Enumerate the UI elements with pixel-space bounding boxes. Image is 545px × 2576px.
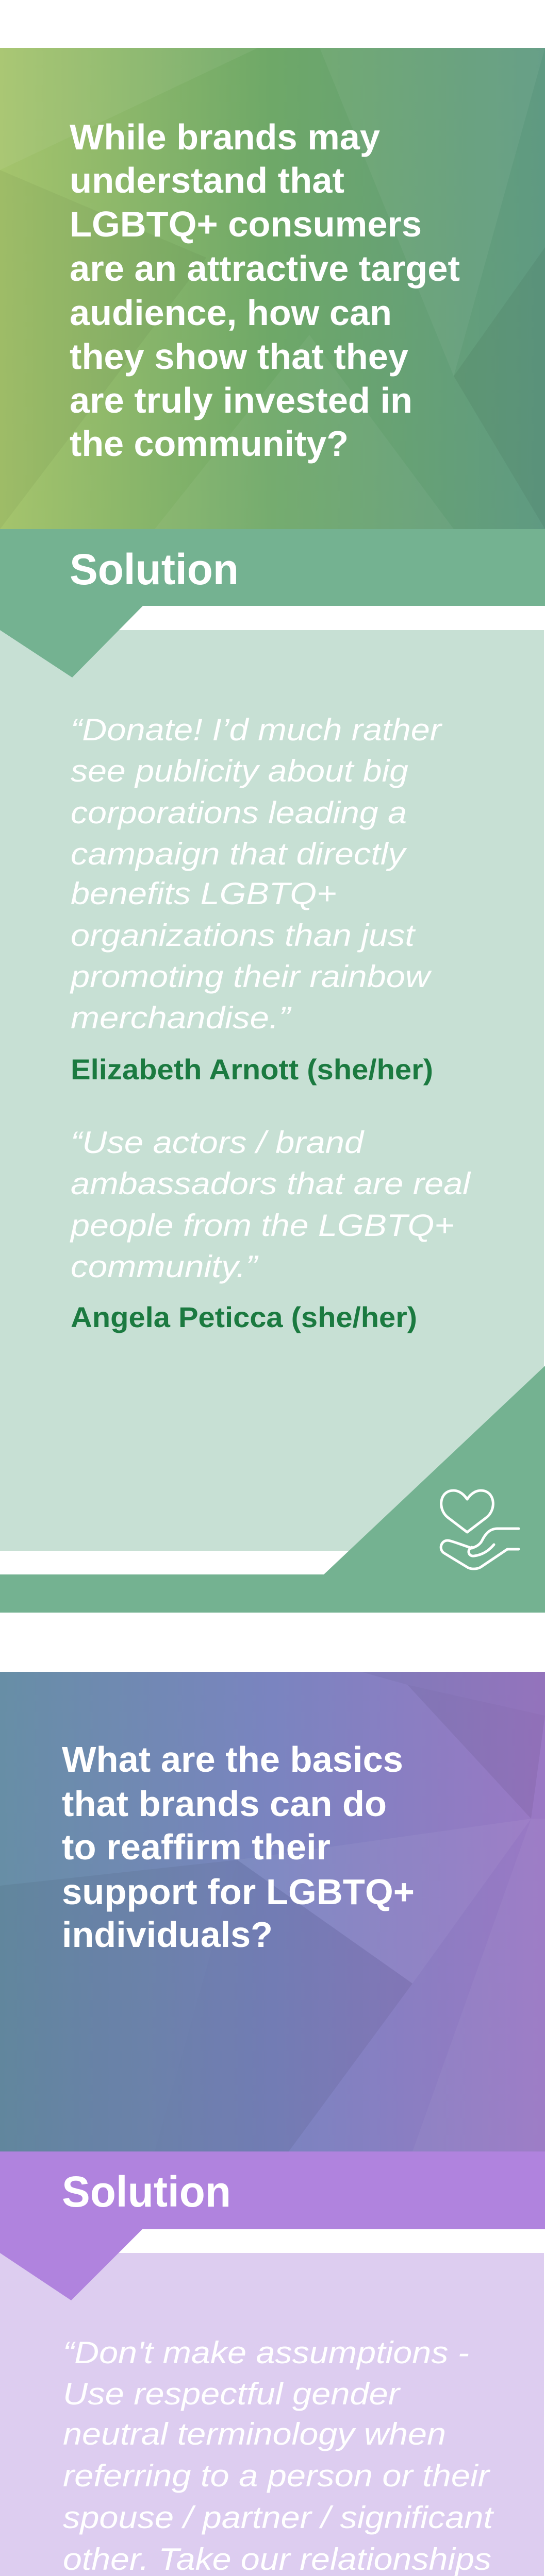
title: question 1: they show that they — [70, 336, 408, 377]
title: question 1: are truly invested in — [70, 380, 412, 420]
title: question 2: What are the basics — [62, 1739, 403, 1780]
quote: Elizabeth Arnott: see publicity about big — [71, 754, 408, 788]
quote: Andrew Damer: spouse / partner / significant — [63, 2500, 494, 2535]
title: question 1: the community? — [70, 423, 349, 464]
title: question 2: support for LGBTQ+ — [62, 1872, 415, 1912]
panel: question 1 header — [0, 48, 545, 529]
quote: Elizabeth Arnott: campaign that directly — [71, 837, 407, 871]
panel: question 2 header — [0, 1672, 545, 2151]
quote: Angela Peticca: people from the LGBTQ+ — [70, 1208, 454, 1243]
quote: Andrew Damer — [63, 2335, 494, 2576]
heading: Solution 1: Solution — [70, 545, 239, 594]
quote: Elizabeth Arnott: promoting their rainbow — [70, 959, 432, 994]
quote: Andrew Damer: other. Take our relationships — [63, 2542, 491, 2576]
quote: Andrew Damer: referring to a person or their — [63, 2459, 490, 2493]
quote: Elizabeth Arnott: merchandise.” — [71, 1001, 292, 1035]
footer corner 1 — [0, 1366, 545, 1613]
heading: Solution 2: Solution — [62, 2167, 231, 2216]
title: question 1 — [70, 117, 460, 464]
quote: Angela Peticca: “Use actors / brand — [71, 1125, 365, 1160]
quote: Elizabeth Arnott: corporations leading a — [71, 795, 407, 830]
quote: Angela Peticca: community.” — [71, 1249, 259, 1284]
solution band 1 with arrow — [0, 529, 545, 677]
title: question 1: understand that — [70, 160, 344, 200]
title: question 2: to reaffirm their — [62, 1827, 331, 1867]
quote: Elizabeth Arnott: organizations than just — [71, 918, 416, 953]
quote: Elizabeth Arnott: “Donate! I’d much rather — [71, 713, 442, 747]
title: question 2: that brands can do — [62, 1784, 387, 1824]
title: question 2: individuals? — [62, 1914, 273, 1955]
title: question 1: are an attractive target — [70, 248, 460, 289]
title: question 1: audience, how can — [70, 293, 392, 333]
title: question 1: LGBTQ+ consumers — [70, 204, 422, 244]
solution band 2 with arrow — [0, 2151, 545, 2300]
quote: Angela Peticca: ambassadors that are real — [71, 1166, 471, 1201]
title: question 1: While brands may — [70, 117, 380, 157]
quote: Angela Peticca — [70, 1125, 471, 1333]
quote: Andrew Damer: “Don't make assumptions - — [63, 2335, 469, 2370]
panel: solution 1 quotes background — [0, 630, 544, 1551]
icon: heart in hand — [441, 1490, 519, 1569]
quote: Elizabeth Arnott — [70, 713, 442, 1086]
quote: Andrew Damer: neutral terminology when — [63, 2417, 446, 2451]
quote: Angela Peticca: Angela Peticca (she/her) — [71, 1301, 417, 1333]
title: question 2 — [62, 1739, 415, 1955]
quote: Elizabeth Arnott: Elizabeth Arnott (she/her) — [71, 1053, 433, 1086]
quote: Andrew Damer: Use respectful gender — [63, 2377, 401, 2411]
panel: solution 2 quotes background — [0, 2253, 544, 2576]
quote: Elizabeth Arnott: benefits LGBTQ+ — [71, 876, 337, 911]
